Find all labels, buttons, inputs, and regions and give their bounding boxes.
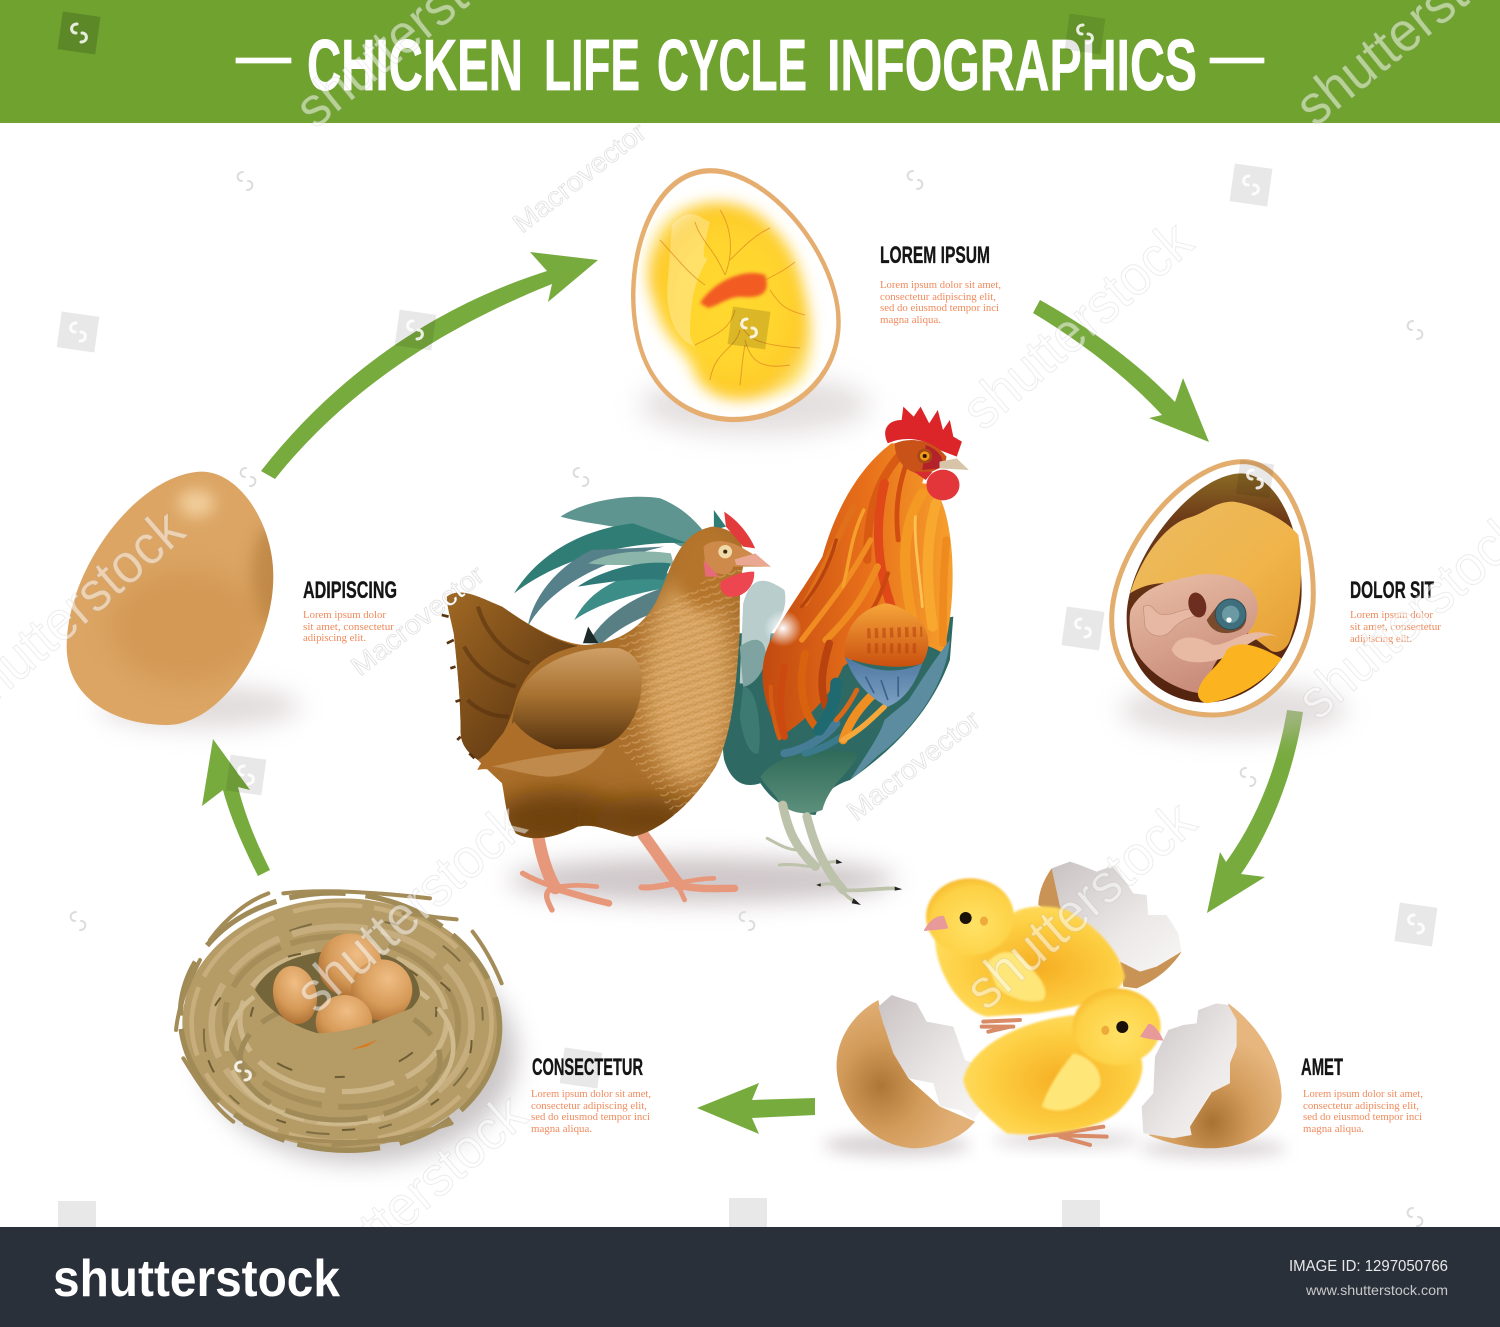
text: dolor sit <box>1350 577 1442 645</box>
front straws <box>273 1003 420 1050</box>
chick 1 beak <box>924 916 948 931</box>
watermarks: Macrovector <box>841 705 986 827</box>
hen wing <box>511 648 642 751</box>
text: lorem ipsum: magna aliqua. <box>880 315 941 326</box>
hatching chicks and broken shells <box>823 862 1287 1158</box>
rooster wing <box>845 603 928 707</box>
embryo egg, early stage <box>598 145 870 443</box>
silver hackle <box>740 581 785 684</box>
title: LIFE <box>544 26 640 106</box>
nest hollow <box>255 950 420 1040</box>
title <box>236 26 1264 106</box>
rooster feathers <box>771 453 946 738</box>
text: amet: Lorem ipsum dolor sit amet, <box>1303 1089 1423 1100</box>
back shell <box>1038 862 1182 988</box>
arrow: chicks to nest <box>697 1083 815 1134</box>
blood veins <box>660 210 805 385</box>
nest straw strands <box>167 877 513 1166</box>
header banner <box>0 0 1500 123</box>
text: adipiscing: Lorem ipsum dolor <box>303 610 387 621</box>
text: adipiscing <box>303 577 397 644</box>
text: consectetur: Lorem ipsum dolor sit amet, <box>531 1089 651 1100</box>
shell rim <box>1112 462 1313 715</box>
whole brown egg <box>67 472 300 728</box>
rooster claws <box>816 859 902 905</box>
hen <box>442 512 771 910</box>
embryo <box>700 273 767 308</box>
eye <box>1215 599 1246 630</box>
text: consectetur: CONSECTETUR <box>532 1054 643 1081</box>
text: consectetur <box>531 1054 651 1135</box>
rooster mid teal feathers <box>784 683 847 753</box>
right shell <box>1142 1003 1282 1148</box>
hen legs <box>523 835 735 910</box>
hackle sparkle <box>764 610 802 647</box>
text: dolor sit: adipiscing elit. <box>1350 634 1412 645</box>
text: lorem ipsum: sed do eiusmod tempor inci <box>880 303 999 314</box>
text: amet: AMET <box>1301 1054 1343 1081</box>
hen tail <box>442 593 578 760</box>
text: dolor sit: DOLOR SIT <box>1350 577 1434 604</box>
title: CHICKEN <box>307 26 523 106</box>
text: adipiscing: ADIPISCING <box>303 577 397 604</box>
rooster neck and saddle <box>762 443 953 737</box>
watermarks: Macrovector <box>345 560 490 682</box>
text: consectetur: magna aliqua. <box>531 1124 592 1135</box>
text: consectetur: consectetur adipiscing elit, <box>531 1101 647 1112</box>
egg outline <box>598 145 862 443</box>
rooster breast blue plumes <box>850 640 950 780</box>
green thigh <box>760 751 859 813</box>
footer url: www.shutterstock.com <box>1305 1282 1448 1298</box>
text: consectetur: sed do eiusmod tempor inci <box>531 1112 650 1123</box>
rooster head <box>885 407 969 500</box>
hen head <box>704 512 771 597</box>
arrow: developed embryo to chicks <box>1207 710 1303 913</box>
text: amet: consectetur adipiscing elit, <box>1303 1101 1419 1112</box>
text: lorem ipsum: Lorem ipsum dolor sit amet, <box>880 280 1001 291</box>
rooster legs <box>767 805 895 902</box>
embryo tail <box>1172 632 1278 662</box>
text: amet: sed do eiusmod tempor inci <box>1303 1112 1422 1123</box>
arrow: embryo to developed embryo <box>1033 300 1209 442</box>
footer bar <box>0 1227 1500 1327</box>
text: lorem ipsum: consectetur adipiscing elit, <box>880 292 996 303</box>
text: lorem ipsum: LOREM IPSUM <box>880 242 990 269</box>
watermarks: Macrovector <box>507 117 652 239</box>
rooster and hen <box>442 407 969 910</box>
rooster <box>514 407 969 905</box>
embryo limb <box>1143 605 1205 636</box>
text: amet <box>1301 1054 1423 1135</box>
footer logo: shutterstock <box>53 1250 340 1308</box>
chick 1 <box>924 878 1125 1032</box>
inner cavity <box>1127 473 1302 703</box>
watermarks: shutterstock <box>284 1081 538 1314</box>
watermarks: shutterstock <box>953 788 1207 1021</box>
embryo egg, late stage <box>1112 462 1347 738</box>
text: adipiscing: adipiscing elit. <box>303 633 366 644</box>
title: CYCLE <box>657 26 807 106</box>
text: adipiscing: sit amet, consectetur <box>303 622 395 633</box>
chick 2 beak <box>1140 1024 1163 1041</box>
embryo body <box>1130 574 1258 693</box>
rooster lower body <box>723 617 953 815</box>
membrane highlight <box>667 214 710 349</box>
rooster tail <box>514 497 726 643</box>
watermarks: shutterstock <box>283 791 537 1024</box>
yolk sac <box>1130 502 1301 652</box>
watermarks: shutterstock <box>950 208 1204 441</box>
hen wing tip <box>477 722 605 777</box>
text: dolor sit: Lorem ipsum dolor <box>1350 610 1434 621</box>
yolk <box>648 202 811 400</box>
text: lorem ipsum <box>880 242 1001 326</box>
rooster saddle plumes <box>836 690 884 740</box>
yolk <box>1198 644 1282 703</box>
watermark outline marks <box>71 171 1422 1226</box>
loose straws <box>176 891 502 1145</box>
watermark marks inside squares <box>71 24 1423 1080</box>
footer image id: IMAGE ID: 1297050766 <box>1289 1258 1448 1275</box>
left shell <box>837 995 983 1148</box>
nest with eggs <box>167 877 517 1166</box>
embryo head socket <box>1186 591 1209 619</box>
hen body shading <box>492 523 750 850</box>
arrow: nest to egg <box>202 739 270 876</box>
arrow: egg to embryo <box>261 252 598 479</box>
text: amet: magna aliqua. <box>1303 1124 1364 1135</box>
nest base <box>182 898 501 1148</box>
nest eggs <box>268 924 419 1048</box>
chick 2 <box>963 988 1163 1145</box>
text: dolor sit: sit amet, consectetur <box>1350 622 1442 633</box>
title: INFOGRAPHICS <box>827 26 1197 106</box>
hen body <box>447 527 744 838</box>
